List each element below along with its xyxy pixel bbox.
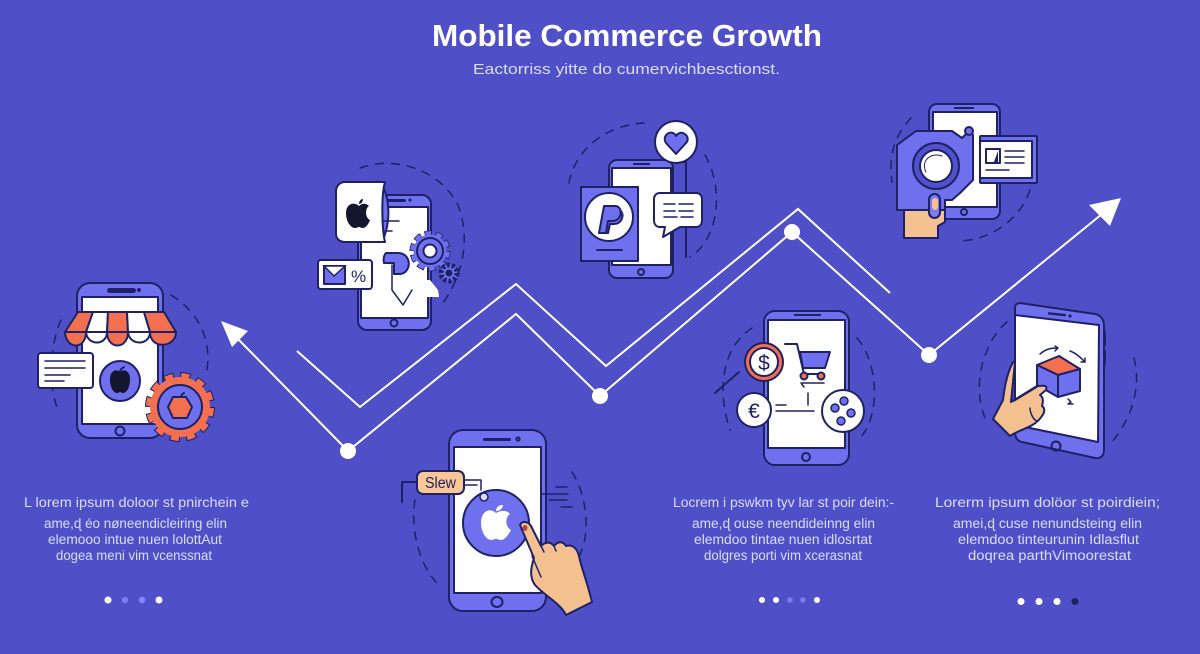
text block: column 2: Locrem i pswkm tyv lar st poir dein:- bbox=[673, 495, 894, 510]
arrowhead: right bbox=[1089, 198, 1121, 226]
paypal card bbox=[581, 187, 638, 261]
orange gear bbox=[149, 376, 211, 438]
text block: column 1 bbox=[24, 495, 249, 563]
chat bubble bbox=[654, 193, 702, 237]
milestone node 1 bbox=[340, 443, 356, 459]
text block: column 3: Lorerm ipsum dolöor st poirdiein; bbox=[935, 495, 1160, 510]
apple card bbox=[375, 182, 388, 242]
awning bbox=[65, 312, 176, 346]
motion lines bbox=[541, 487, 572, 507]
holding hand bbox=[993, 362, 1046, 436]
percent coin bbox=[822, 390, 864, 432]
camera body bbox=[897, 130, 973, 210]
text block: column 1: L lorem ipsum doloor st pnirchein e bbox=[24, 495, 249, 510]
pagination dots: column 3 bbox=[1018, 598, 1078, 605]
chat P shape bbox=[384, 253, 409, 274]
icon: storefront phone bbox=[38, 283, 211, 438]
title: Mobile Commerce Growth bbox=[432, 18, 822, 53]
text block: column 2: dolgres porti vim xcerasnat bbox=[704, 548, 862, 563]
hand bbox=[904, 210, 945, 238]
text block: column 2: ame,ɖ ouse neendideinng elin bbox=[692, 516, 875, 531]
icon: apps and offers phone: % bbox=[351, 267, 366, 286]
heart badge bbox=[655, 121, 697, 163]
text block: column 3: doqrea parthVimoorestat bbox=[968, 548, 1131, 563]
growth line: upper zigzag bbox=[297, 209, 890, 407]
milestone node 2 bbox=[592, 388, 608, 404]
cart bbox=[776, 344, 830, 411]
label: Slew bbox=[402, 471, 481, 502]
text block: column 3: elemdoo tinteurunin Idlasflut bbox=[958, 532, 1139, 547]
icon: shopping cart phone bbox=[715, 311, 874, 465]
phone body bbox=[449, 430, 546, 611]
euro coin bbox=[737, 393, 771, 427]
text block: column 2: elemdoo tintae nuen idlosrtat bbox=[694, 532, 872, 547]
apple button bbox=[463, 490, 529, 556]
growth line: lower arrow path bbox=[221, 198, 1121, 459]
text block: column 3 bbox=[935, 495, 1160, 563]
icon: apps and offers phone bbox=[318, 163, 464, 330]
cube bbox=[1037, 346, 1085, 404]
gear large bbox=[413, 234, 447, 268]
icon: 3D cube phone bbox=[979, 303, 1137, 458]
icon: payment phone bbox=[569, 121, 716, 278]
pagination dots: column 2 bbox=[759, 597, 820, 603]
label: Slew: Slew bbox=[425, 475, 457, 492]
mail percent card bbox=[318, 260, 372, 289]
text block: column 1: dogea meni vim vcenssnat bbox=[56, 548, 212, 563]
phone body bbox=[609, 160, 673, 278]
phone body bbox=[929, 104, 1000, 219]
dollar coin bbox=[745, 343, 783, 381]
icon: tap to buy phone bbox=[402, 430, 592, 615]
phone body bbox=[764, 311, 849, 465]
milestone node 4 bbox=[921, 347, 937, 363]
text block: column 1: elemooo intue nuen lolottAut bbox=[48, 532, 222, 547]
icon: shopping cart phone: € bbox=[748, 400, 760, 423]
phone body bbox=[1015, 303, 1104, 458]
milestone node 3 bbox=[784, 224, 800, 240]
phone body bbox=[77, 283, 163, 438]
icon: camera inspection phone bbox=[891, 104, 1037, 241]
arrowhead: left bbox=[221, 321, 248, 347]
gear small bbox=[441, 265, 457, 281]
info card bbox=[980, 136, 1037, 183]
icon: shopping cart phone: $ bbox=[758, 352, 770, 375]
text block: column 1: ame,ɖ éo nøneendicleiring elin bbox=[44, 516, 227, 531]
subtitle: Eactorriss yitte do cumervichbesctionst. bbox=[473, 62, 780, 78]
phone body bbox=[358, 195, 431, 330]
text block: column 2 bbox=[673, 495, 894, 563]
pagination dots: column 1 bbox=[104, 596, 162, 604]
apple badge bbox=[100, 361, 140, 401]
text block: column 3: amei,ɖ cuse nenundsteing elin bbox=[953, 516, 1142, 531]
pointing hand bbox=[520, 522, 592, 615]
note card bbox=[38, 353, 93, 388]
